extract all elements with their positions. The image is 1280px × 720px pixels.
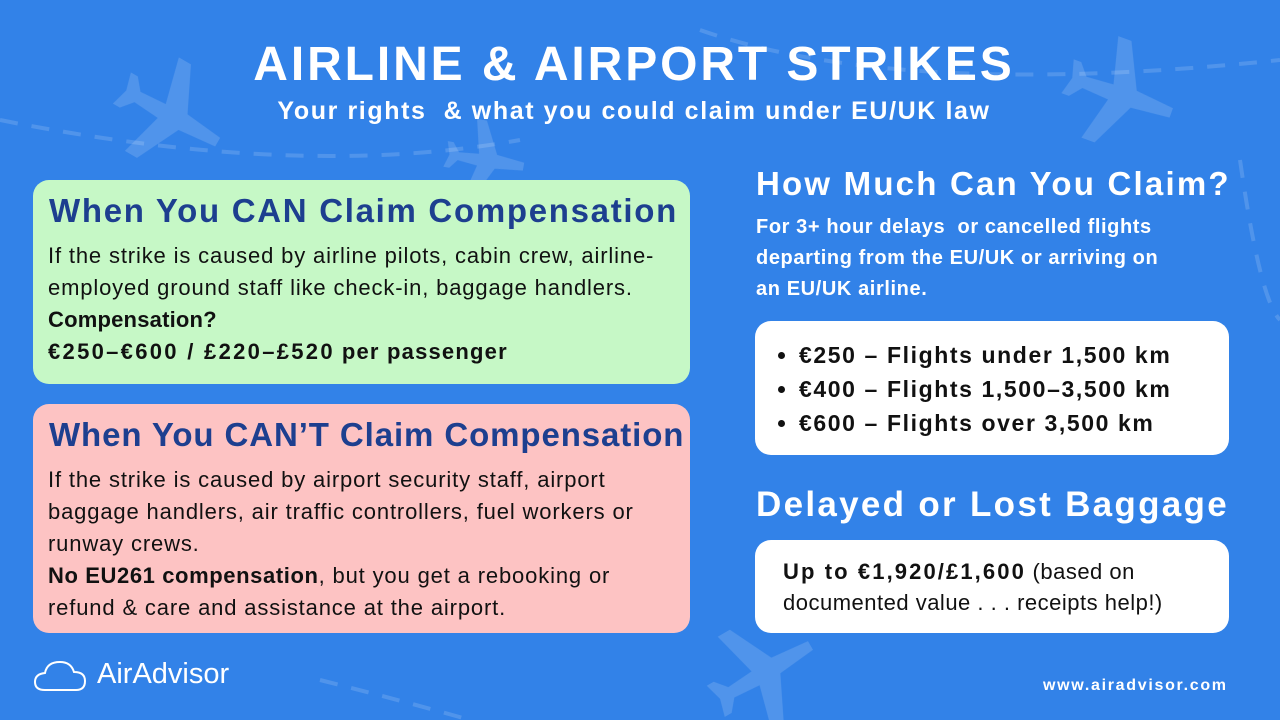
text: AirAdvisor: AirAdvisor: [97, 658, 229, 690]
url: www.airadvisor.com: [1043, 677, 1228, 694]
panel: baggage: [755, 540, 1229, 633]
text: baggage: documented value . . . receipts help!): [783, 590, 1163, 615]
text: can't claim: baggage handlers, air traffic controllers, fuel workers or: [48, 499, 634, 524]
text: can't claim: refund & care and assistance at the airport.: [48, 595, 506, 620]
text: can claim: [48, 243, 654, 364]
text: can't claim: If the strike is caused by airport security staff, airport: [48, 467, 606, 492]
text: how much description: [756, 216, 1158, 300]
list: amounts: €250 – Flights under 1,500 km: [799, 342, 1171, 368]
text: can't claim: [48, 467, 634, 620]
heading: how much: How Much Can You Claim?: [756, 165, 1231, 202]
text: how much description: departing from the EU/UK or arriving on: [756, 247, 1158, 269]
title: AIRLINE & AIRPORT STRIKES: [253, 38, 1015, 91]
list: amounts: [778, 342, 1171, 436]
heading: baggage: Delayed or Lost Baggage: [756, 485, 1229, 524]
panel: can claim: [33, 180, 690, 384]
text: can claim: If the strike is caused by airline pilots, cabin crew, airline-: [48, 243, 654, 268]
heading: can't claim: When You CAN’T Claim Compensation: [49, 416, 684, 453]
list: amounts: €400 – Flights 1,500–3,500 km: [799, 376, 1171, 402]
text: can claim: €250–€600 / £220–£520 per passenger: [48, 339, 508, 364]
heading: can claim: When You CAN Claim Compensation: [49, 192, 678, 229]
panel: compensation amounts: [755, 321, 1229, 455]
icon: cloud: [34, 661, 86, 691]
text: can't claim: No EU261 compensation, but you get a rebooking or: [48, 563, 610, 588]
list: amounts: €600 – Flights over 3,500 km: [799, 410, 1154, 436]
text: how much description: For 3+ hour delays or cancelled flights: [756, 216, 1152, 238]
text: can claim: Compensation?: [48, 307, 217, 332]
text: how much description: an EU/UK airline.: [756, 278, 927, 300]
text: can claim: employed ground staff like check-in, baggage handlers.: [48, 275, 633, 300]
text: baggage: [783, 559, 1163, 615]
subtitle: Your rights & what you could claim under EU/UK law: [277, 97, 991, 125]
text: can't claim: runway crews.: [48, 531, 200, 556]
text: baggage: Up to €1,920/£1,600 (based on: [783, 559, 1135, 584]
panel: can't claim: [33, 404, 690, 633]
logo: [34, 658, 229, 691]
